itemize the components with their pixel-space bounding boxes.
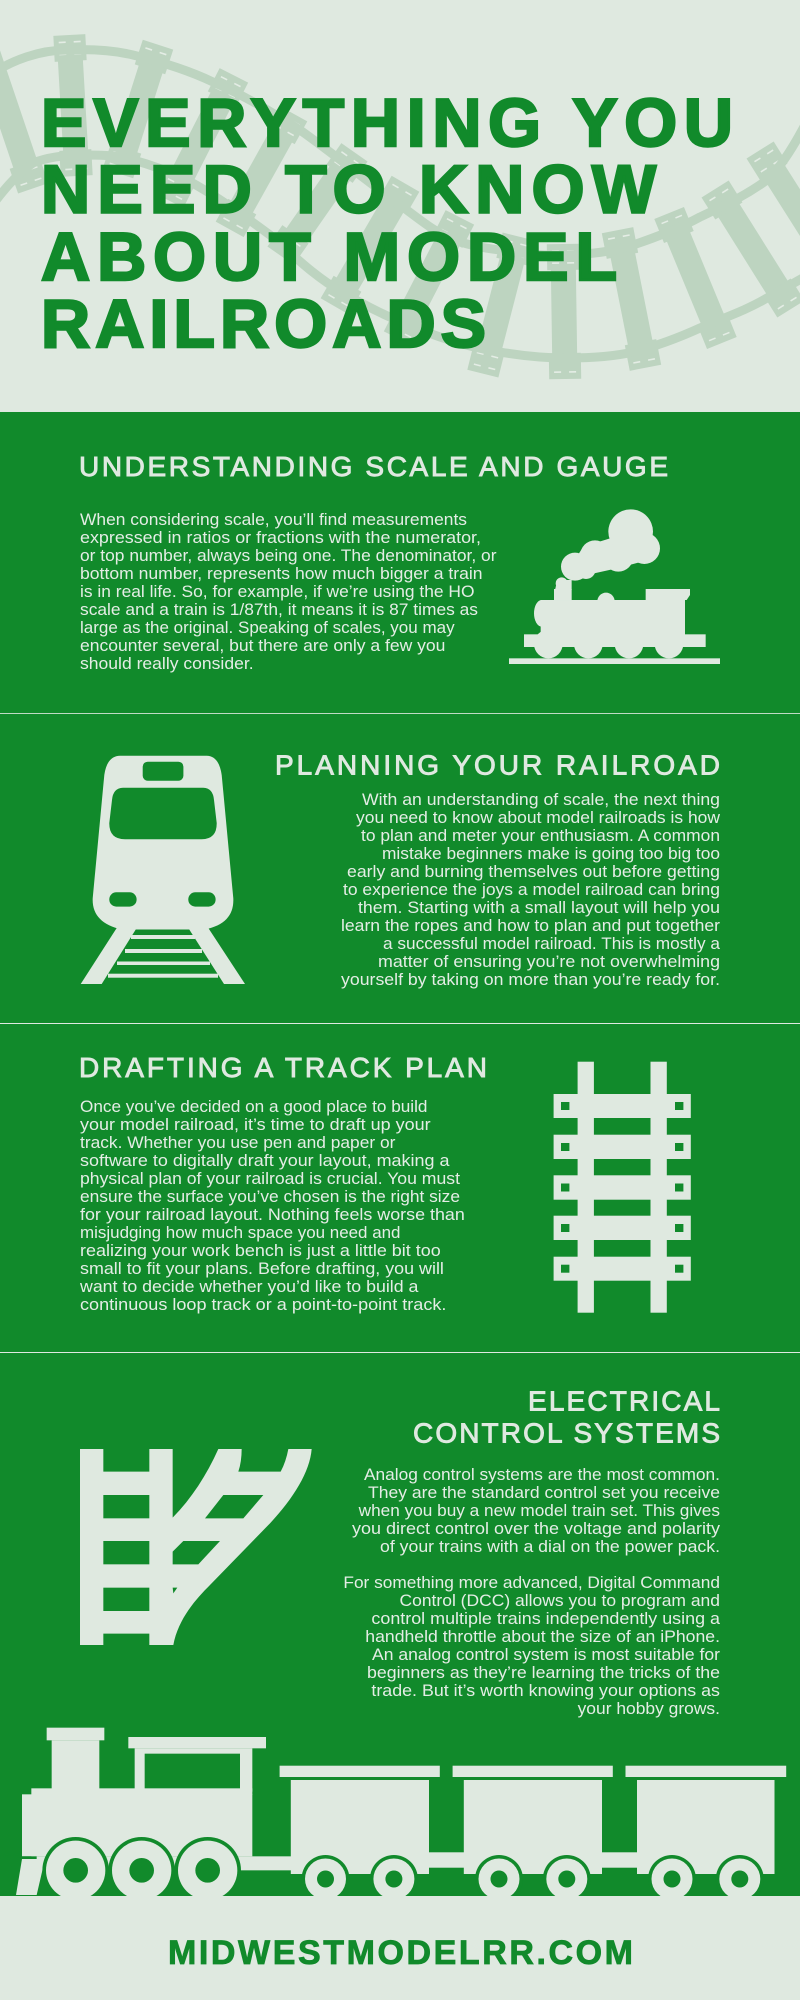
text block: digital command control: Control (DCC) allows you to program and	[400, 1592, 720, 1610]
text block: track plan: want to decide whether you’d like to build a	[79, 1278, 419, 1296]
icon: straight track	[554, 1062, 691, 1313]
text block: digital command control: your hobby grows.	[578, 1700, 720, 1718]
icon: front view train on tracks	[81, 756, 245, 984]
panel: understanding scale and gauge	[0, 412, 800, 714]
text block: planning: to plan and meter your enthusiasm. A common	[361, 827, 720, 845]
text block: analog control: of your trains with a dial on the power pack.	[380, 1538, 720, 1556]
text block: scale: scale and a train is 1/87th, it means it is 87 times as	[80, 601, 478, 619]
text block: track plan: physical plan of your railroad is crucial. You must	[80, 1170, 460, 1188]
text block: planning: learn the ropes and how to plan and put together	[341, 917, 721, 935]
text block: track plan: small to fit your plans. Before drafting, you will	[80, 1260, 444, 1278]
text block: track plan: track. Whether you use pen and paper or	[80, 1134, 396, 1152]
text block: scale: is in real life. So, for example, if we’re using the HO	[80, 583, 475, 601]
text block: track plan: software to digitally draft your layout, making a	[80, 1152, 450, 1170]
text block: analog control: Analog control systems are the most common.	[364, 1466, 720, 1484]
text block: planning: With an understanding of scale, the next thing	[362, 791, 720, 809]
heading: understanding scale and gauge: UNDERSTANDING SCALE AND GAUGE	[79, 451, 668, 482]
illustration: train with three wagons	[16, 1728, 786, 1904]
text block: scale: or top number, always being one. The denominator, or	[80, 547, 497, 565]
text block: planning: you need to know about model railroads is how	[356, 809, 720, 827]
text block: planning: a successful model railroad. This is mostly a	[383, 935, 721, 953]
text block: track plan: ensure the surface you’ve chosen is the right size	[80, 1188, 460, 1206]
heading: electrical control systems	[413, 1385, 720, 1448]
text block: track plan: Once you’ve decided on a good place to build	[80, 1098, 427, 1116]
text block: scale: bottom number, represents how much bigger a train	[80, 565, 483, 583]
title: NEED TO KNOW	[41, 151, 657, 227]
text block: scale: expressed in ratios or fractions with the numerator,	[80, 529, 481, 547]
locomotive	[16, 1728, 291, 1904]
text block: planning: them. Starting with a small layout will help you	[358, 899, 720, 917]
text block: scale: large as the original. Speaking of scales, you may	[80, 619, 455, 637]
header panel	[0, 0, 800, 412]
text block: track plan: for your railroad layout. Nothing feels worse than	[80, 1206, 465, 1224]
panel: electrical control systems	[0, 1353, 800, 1904]
text block: analog control: you direct control over the voltage and polarity	[352, 1520, 721, 1538]
text block: track plan: realizing your work bench is just a little bit too	[80, 1242, 441, 1260]
background railroad track illustration	[0, 34, 800, 379]
text block: digital command control: handheld throttle about the size of an iPhone.	[365, 1628, 720, 1646]
text block: analog control: They are the standard control set you receive	[368, 1484, 720, 1502]
text block: track plan: continuous loop track or a point-to-point track.	[80, 1296, 446, 1314]
text block: planning: to experience the joys a model railroad can bring	[343, 881, 720, 899]
text block: digital command control: trade. But it’s worth knowing your options as	[371, 1682, 720, 1700]
wagons	[280, 1766, 786, 1903]
text block: digital command control: control multiple trains independently using a	[371, 1610, 721, 1628]
text block: scale: When considering scale, you’ll find measurements	[80, 511, 467, 529]
text block: digital command control: For something more advanced, Digital Command	[343, 1574, 720, 1592]
text block: track plan: misjudging how much space you need and	[80, 1224, 401, 1242]
footer website: MIDWESTMODELRR.COM	[168, 1934, 633, 1972]
footer	[0, 1896, 800, 2000]
heading: drafting a track plan: DRAFTING A TRACK PLAN	[79, 1052, 487, 1083]
heading: electrical control systems: ELECTRICAL	[528, 1385, 720, 1416]
text block: digital command control: beginners as they’re learning the tricks of the	[367, 1664, 720, 1682]
icon: steam locomotive	[509, 509, 720, 664]
text block: planning: yourself by taking on more than you’re ready for.	[341, 971, 720, 989]
title: ABOUT MODEL	[41, 219, 617, 295]
text block: digital command control: An analog control system is most suitable for	[372, 1646, 721, 1664]
panel: planning your railroad	[0, 714, 800, 1023]
text block: track plan	[79, 1098, 465, 1314]
text block: planning	[341, 791, 721, 989]
text block: digital command control	[343, 1574, 721, 1718]
text block: planning: early and burning themselves out before getting	[347, 863, 720, 881]
text block: planning: mistake beginners make is going too big too	[382, 845, 720, 863]
icon: railroad switch track	[80, 1449, 312, 1645]
title: RAILROADS	[41, 286, 486, 362]
text block: analog control	[352, 1466, 721, 1556]
text block: scale: encounter several, but there are only a few you	[80, 637, 445, 655]
text block: track plan: your model railroad, it’s time to draft up your	[80, 1116, 431, 1134]
panel: drafting a track plan	[0, 1024, 800, 1352]
text block: scale	[80, 511, 497, 673]
text block: analog control: when you buy a new model train set. This gives	[358, 1502, 720, 1520]
text block: scale: should really consider.	[80, 655, 254, 673]
text block: planning: matter of ensuring you’re not overwhelming	[378, 953, 720, 971]
title	[41, 85, 733, 362]
heading: electrical control systems: CONTROL SYSTEMS	[413, 1417, 720, 1448]
heading: planning your railroad: PLANNING YOUR RAILROAD	[275, 749, 720, 780]
title: EVERYTHING YOU	[41, 85, 733, 161]
